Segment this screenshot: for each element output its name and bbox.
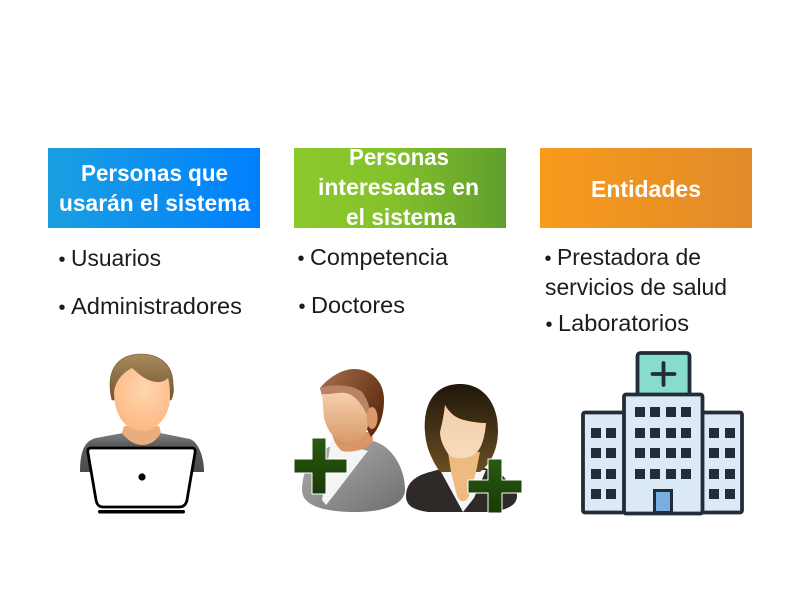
list: competencia y doctores: Competencia	[310, 244, 448, 270]
heading: entidades	[540, 148, 752, 228]
list: prestadora y laboratorios: •	[546, 314, 553, 336]
list: usuarios y administradores: •	[58, 249, 66, 271]
heading: personas interesadas en el sistema: Personas	[349, 144, 449, 170]
list: prestadora y laboratorios: servicios de salud	[545, 274, 727, 300]
heading: personas que usarán el sistema: usarán el sistema	[59, 190, 250, 216]
panel: personas que usarán el sistema	[48, 148, 260, 514]
list: competencia y doctores: Doctores	[311, 292, 405, 318]
heading: personas interesadas en el sistema: el sistema	[346, 204, 456, 230]
list: competencia y doctores: •	[298, 248, 305, 270]
icon: person with laptop	[80, 354, 204, 514]
heading: entidades: Entidades	[591, 176, 701, 202]
list: prestadora y laboratorios	[544, 244, 727, 336]
heading: personas que usarán el sistema: Personas que	[81, 160, 228, 186]
icon: hospital building	[583, 353, 742, 514]
list: competencia y doctores: •	[298, 296, 306, 318]
list: usuarios y administradores	[58, 245, 242, 319]
panel: entidades	[540, 148, 752, 514]
heading: personas interesadas en el sistema: interesadas en	[318, 174, 479, 200]
list: prestadora y laboratorios: Laboratorios	[558, 310, 689, 336]
list: prestadora y laboratorios: Prestadora de	[557, 244, 701, 270]
panel: personas interesadas en el sistema	[294, 144, 522, 513]
male doctor	[294, 369, 405, 512]
list: usuarios y administradores: •	[58, 297, 66, 319]
icon: doctors with green crosses	[294, 369, 522, 513]
list: prestadora y laboratorios: •	[544, 248, 552, 270]
list: usuarios y administradores: Usuarios	[71, 245, 161, 271]
heading: personas que usarán el sistema	[48, 148, 260, 228]
female doctor	[406, 384, 522, 513]
heading: personas interesadas en el sistema	[294, 144, 506, 230]
list: competencia y doctores	[298, 244, 448, 318]
list: usuarios y administradores: Administradores	[71, 293, 242, 319]
